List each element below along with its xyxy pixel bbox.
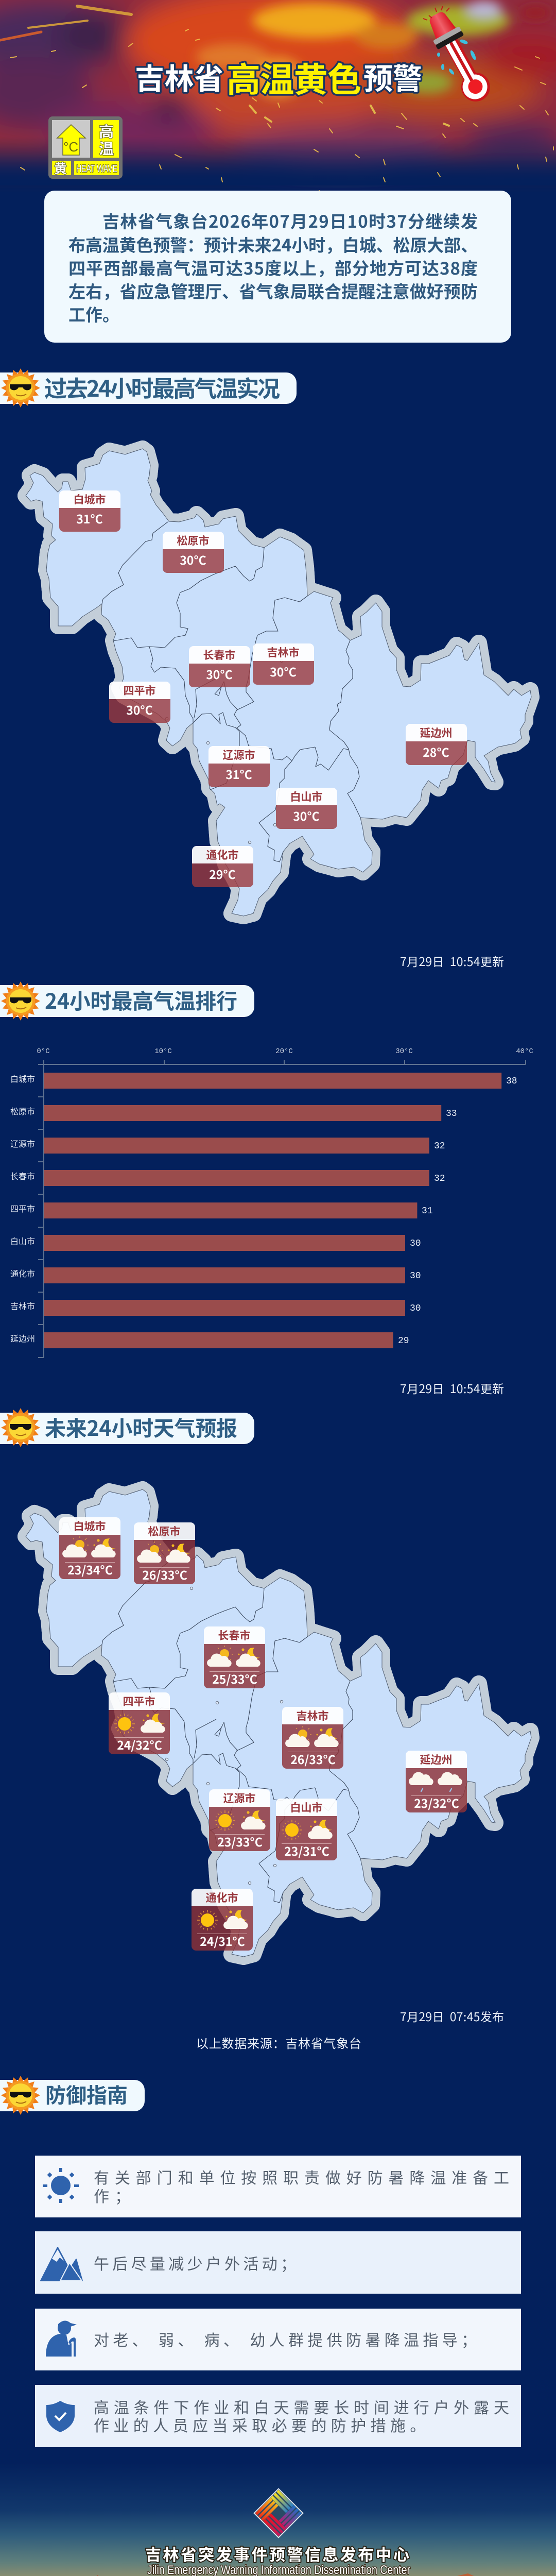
bar chart: temperature ranking: 30	[410, 1271, 421, 1281]
map: weather forecast	[26, 1489, 531, 1957]
forecast: Baicheng: 23/34°C	[67, 1561, 113, 1578]
bar chart: temperature ranking: 31	[422, 1206, 433, 1216]
bar chart: temperature ranking: 四平市	[10, 1202, 35, 1214]
label: Changchun: 30°C	[206, 665, 233, 683]
update time: chart: 7月29日 10:54更新	[400, 1379, 504, 1397]
forecast: Liaoyuan: 23/33°C	[217, 1833, 263, 1850]
bar chart: temperature ranking: 30	[410, 1303, 421, 1314]
icon: heat wave yellow warning badge: °C	[63, 139, 78, 155]
label: Yanbian: 延边州	[420, 725, 452, 740]
forecast: Liaoyuan: 辽源市	[223, 1790, 255, 1806]
label: Jilin: 吉林市	[267, 645, 300, 660]
bar chart: temperature ranking: 长春市	[10, 1170, 35, 1182]
bar chart: temperature ranking: 33	[446, 1109, 457, 1119]
label: Tonghua: 通化市	[206, 847, 239, 862]
label: Tonghua	[192, 846, 253, 887]
bar chart: temperature ranking: 0°C	[37, 1047, 50, 1056]
warning text panel: 四平西部最高气温可达35度以上，部分地方可达38度	[68, 255, 478, 280]
title: 高温黄色	[227, 53, 361, 102]
forecast: Jilin: 吉林市	[297, 1708, 328, 1723]
forecast: Siping: 四平市	[123, 1693, 155, 1709]
heading: defence guide: 防御指南	[45, 2079, 128, 2109]
bar chart: temperature ranking: 松原市	[10, 1105, 35, 1117]
forecast: Baicheng	[59, 1517, 120, 1579]
panel: outdoor workers protection: 作业的人员应当采取必要的防护措施。	[94, 2413, 430, 2436]
label: Siping: 30°C	[126, 701, 153, 718]
icon: elderly person	[46, 2320, 77, 2357]
panel: prepare for heat: 作；	[94, 2184, 136, 2207]
icon: heat wave yellow warning badge: 温	[99, 137, 114, 159]
heading: 24h max temperature ranking	[0, 981, 254, 1021]
bar chart: temperature ranking: 通化市	[10, 1267, 35, 1279]
bar chart: temperature ranking	[10, 1047, 533, 1358]
footer mountains	[0, 2573, 556, 2576]
bar chart: temperature ranking: 辽源市	[10, 1137, 35, 1149]
label: Baishan	[276, 788, 337, 829]
forecast: Changchun: 长春市	[218, 1628, 250, 1643]
bar chart: temperature ranking: 29	[398, 1336, 409, 1346]
label: Jilin: 30°C	[270, 663, 297, 680]
heading: past 24h max temperature	[0, 368, 297, 408]
bar chart: temperature ranking: 32	[434, 1141, 445, 1151]
bar chart: temperature ranking: 32	[434, 1174, 445, 1184]
label: Yanbian	[406, 724, 467, 765]
icon: mountains	[41, 2247, 82, 2281]
label: Tonghua: 29°C	[209, 865, 236, 883]
label: Changchun: 长春市	[203, 647, 236, 663]
label: Liaoyuan: 31°C	[225, 765, 252, 783]
forecast: Baishan: 白山市	[290, 1800, 322, 1815]
panel: reduce outdoor activity	[35, 2231, 521, 2294]
forecast: Jilin	[282, 1707, 343, 1769]
label: Baishan: 30°C	[293, 807, 320, 824]
label: Liaoyuan: 辽源市	[222, 747, 255, 762]
bar chart: temperature ranking: 20°C	[275, 1047, 293, 1056]
warning text panel: 工作。	[68, 301, 119, 326]
heading: next 24h forecast: 未来24小时天气预报	[45, 1411, 237, 1442]
heading: past 24h max temperature: 过去24小时最高气温实况	[44, 370, 280, 403]
warning text panel: 布高温黄色预警：预计未来24小时，白城、松原大部、	[68, 232, 478, 257]
label: Siping: 四平市	[124, 683, 155, 698]
data source note: 以上数据来源：吉林省气象台	[196, 2033, 361, 2052]
forecast: Siping	[109, 1692, 170, 1754]
label: Songyuan: 松原市	[177, 533, 209, 548]
forecast: Tonghua	[192, 1889, 253, 1951]
panel: outdoor workers protection	[35, 2385, 521, 2447]
icon: heat wave yellow warning badge: 黄	[54, 159, 67, 177]
bar chart: temperature ranking: 白城市	[10, 1072, 35, 1084]
bar chart: temperature ranking: 40°C	[516, 1047, 533, 1056]
update time: map: 7月29日 10:54更新	[400, 952, 504, 970]
map labels: observed temperature by city	[59, 490, 467, 887]
forecast: Songyuan: 26/33°C	[142, 1566, 187, 1583]
label: Baishan: 白山市	[290, 789, 322, 804]
publish time: forecast: 7月29日 07:45发布	[400, 2007, 504, 2025]
bar chart: temperature ranking: 30	[410, 1239, 421, 1249]
label: Baicheng	[59, 490, 120, 532]
forecast: Baishan: 23/31°C	[284, 1842, 329, 1859]
warning text panel: 左右，省应急管理厅、省气象局联合提醒注意做好预防	[68, 278, 478, 303]
icon: heat wave yellow warning badge	[48, 116, 123, 179]
forecast: Yanbian: 延边州	[420, 1752, 452, 1767]
bar chart: temperature ranking: 10°C	[154, 1047, 172, 1056]
icon: shield check	[46, 2401, 75, 2432]
heading: 24h max temperature ranking: 24小时最高气温排行	[45, 984, 237, 1015]
label: Jilin	[253, 643, 314, 685]
icon: heat wave yellow warning badge: 高	[99, 120, 114, 142]
title: 吉林省	[135, 56, 223, 98]
forecast: Yanbian: 23/32°C	[414, 1794, 459, 1811]
warning text panel: 吉林省气象台2026年07月29日10时37分继续发	[102, 208, 478, 233]
logo: diamond emblem	[253, 2488, 304, 2538]
bar chart: temperature ranking: 吉林市	[10, 1299, 35, 1312]
label: Baicheng: 31°C	[76, 510, 103, 527]
icon: heat wave yellow warning badge: HEAT WAVE	[76, 163, 117, 175]
label: Liaoyuan	[208, 746, 270, 787]
label: Songyuan	[163, 532, 224, 573]
organisation name: 吉林省突发事件预警信息发布中心	[145, 2542, 409, 2565]
forecast: Liaoyuan	[209, 1789, 270, 1851]
title	[135, 53, 422, 102]
map: observed max temperature	[26, 449, 531, 916]
map labels: forecast by city	[59, 1517, 467, 1951]
forecast: Jilin: 26/33°C	[290, 1750, 336, 1768]
forecast: Yanbian	[406, 1751, 467, 1812]
organisation name	[145, 2542, 410, 2576]
forecast: Siping: 24/32°C	[117, 1736, 162, 1753]
forecast: Changchun: 25/33°C	[212, 1670, 257, 1687]
forecast: Songyuan	[134, 1522, 195, 1584]
label: Baicheng: 白城市	[73, 492, 106, 507]
bar chart: temperature ranking: 白山市	[10, 1234, 35, 1247]
icon: sun	[43, 2168, 79, 2203]
panel: outdoor workers protection: 高温条件下作业和白天需要长时间进行户外露天	[94, 2395, 509, 2418]
forecast: Tonghua: 通化市	[206, 1890, 238, 1905]
forecast: Baishan	[276, 1799, 337, 1860]
bar chart: temperature ranking: 38	[506, 1076, 517, 1087]
label: Changchun	[189, 646, 250, 687]
warning text panel	[44, 191, 511, 343]
panel: reduce outdoor activity: 午后尽量减少户外活动；	[94, 2251, 296, 2274]
forecast: Changchun	[204, 1626, 265, 1688]
label: Yanbian: 28°C	[423, 743, 449, 760]
label: Siping	[109, 682, 170, 723]
bar chart: temperature ranking: 30°C	[395, 1047, 413, 1056]
heading: next 24h forecast	[0, 1408, 254, 1447]
title: 预警	[363, 56, 422, 98]
footer sky	[0, 2463, 556, 2576]
heading: defence guide	[0, 2076, 145, 2115]
bar chart: temperature ranking: 延边州	[10, 1332, 35, 1344]
panel: guidance for vulnerable groups: 对老、 弱、 病、 幼人群提供防暑降温指导；	[94, 2328, 477, 2350]
icon: thermometer with alarm beacon	[423, 6, 496, 107]
label: Songyuan: 30°C	[180, 551, 206, 568]
forecast: Baicheng: 白城市	[73, 1518, 106, 1534]
panel: guidance for vulnerable groups	[35, 2309, 521, 2370]
header fire background	[0, 0, 556, 194]
panel: prepare for heat	[35, 2156, 521, 2217]
forecast: Songyuan: 松原市	[148, 1523, 180, 1539]
forecast: Tonghua: 24/31°C	[200, 1932, 245, 1950]
panel: prepare for heat: 有关部门和单位按照职责做好防暑降温准备工	[94, 2165, 509, 2188]
